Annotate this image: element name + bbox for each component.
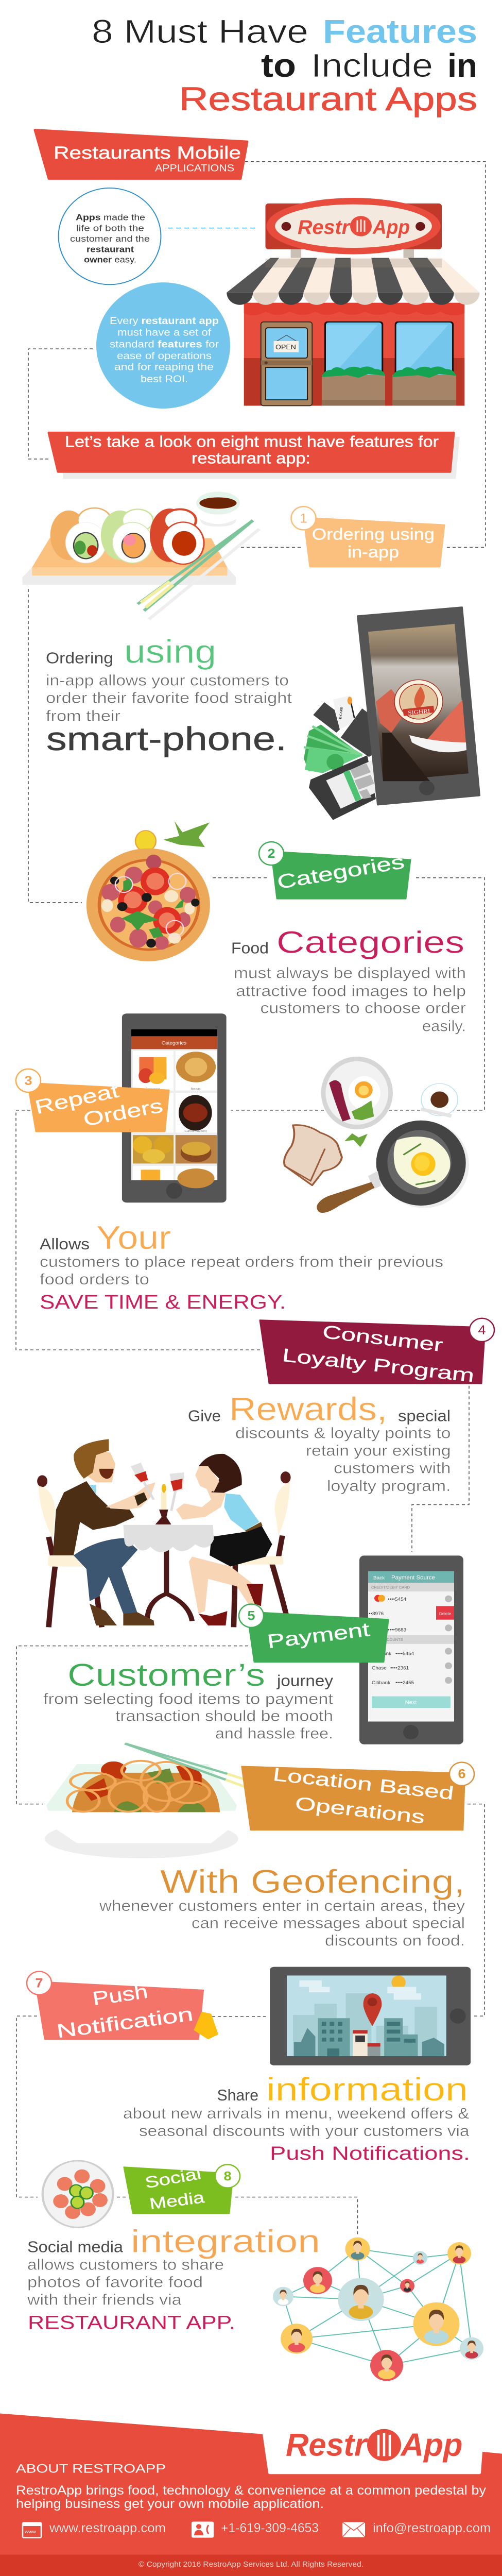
icon: phone with payment screen: ••••2361: [390, 1666, 409, 1671]
text: food categories: customers to choose order: [261, 1000, 466, 1016]
callout: apps circle: life of both the: [76, 223, 144, 233]
banner: let's take a look: Let’s take a look on eight must have features for: [65, 433, 439, 450]
text: social media integration: allows customers to share: [27, 2257, 224, 2274]
banner: 4 consumer loyalty program: Consumer: [321, 1321, 444, 1355]
icon: phone with payment screen: COUNTS: [387, 1637, 403, 1642]
icon: phone with payment screen: ••••5454: [388, 1597, 407, 1602]
banner: 6 location based operations: [241, 1762, 474, 1830]
title: Restaurant Apps: [179, 80, 477, 117]
icon: noodle bowl with chopsticks: [45, 1743, 266, 1858]
icon: breakfast plates and pan: [284, 1057, 469, 1213]
text: give rewards: discounts & loyalty points to: [235, 1425, 451, 1442]
text: customer's journey: and hassle free.: [215, 1725, 333, 1742]
icon: phone with categories screen: Curries (Mutton): [184, 1130, 207, 1133]
callout: every restaurant app circle: [96, 282, 230, 409]
banner: 5 payment: Payment: [266, 1619, 371, 1653]
text: ordering using: smart-phone.: [46, 720, 287, 757]
contact: email: info@restroapp.com: [373, 2520, 491, 2535]
text: share information: seasonal discounts with your customers via: [139, 2123, 470, 2140]
icon: phone with payment screen: ••••5454: [395, 1651, 414, 1656]
text: customer's journey: from selecting food items to payment: [43, 1691, 334, 1707]
text: share information: Share: [217, 2087, 258, 2104]
icon: phone with payment screen: ank: [383, 1651, 391, 1656]
text: food categories: [231, 925, 466, 1035]
text: ordering using: [46, 633, 292, 757]
icon: phone with categories screen: Breads: [191, 1088, 201, 1091]
about text: [16, 2462, 487, 2511]
icon: phone with wallet and payment terminal: E-CARD: [339, 706, 344, 719]
callout: every restaurant app circle: best ROI.: [141, 374, 188, 385]
text: ordering using: order their favorite food straight: [46, 690, 292, 706]
banner: restaurants mobile applications: Restaurants Mobile: [54, 143, 241, 163]
title: Features: [323, 13, 477, 49]
banner: let's take a look: [49, 433, 460, 479]
banner: 1 ordering using in-app: [291, 506, 444, 567]
banner: 4 consumer loyalty program: Loyalty Program: [281, 1345, 475, 1386]
text: allows your customers: Allows: [40, 1235, 90, 1253]
callout: apps circle: owner easy.: [84, 255, 136, 264]
text: with geofencing: can receive messages about special: [192, 1915, 465, 1931]
about text: ABOUT RESTROAPP: [16, 2462, 166, 2476]
text: food categories: easily.: [422, 1018, 466, 1035]
banner: 7 push notification: Push: [91, 1981, 149, 2010]
title: in: [447, 47, 477, 83]
icon: tablet with map pin: [270, 1967, 471, 2065]
text: customer's journey: transaction should be mooth: [115, 1708, 333, 1724]
text: ordering using: Ordering: [46, 649, 113, 667]
icon: restaurant storefront: [227, 198, 479, 405]
text: food categories: Food: [231, 939, 269, 957]
title: [92, 13, 477, 117]
banner: 7 push notification: Notification: [55, 2004, 195, 2042]
icon: restaurant storefront: App: [372, 216, 410, 239]
text: ordering using: using: [124, 633, 216, 670]
banner: 3 repeat orders: Orders: [81, 1095, 165, 1130]
text: social media integration: [27, 2223, 320, 2333]
icon: restaurant storefront: OPEN: [275, 343, 296, 351]
text: allows your customers: customers to place repeat orders from their previous: [40, 1254, 443, 1270]
text: social media integration: integration: [131, 2223, 320, 2259]
contact: website: www: [24, 2529, 37, 2535]
icon: phone with wallet and payment terminal: [304, 607, 479, 820]
logo: RestroApp: App: [400, 2427, 462, 2463]
banner: 6 location based operations: Location Based: [272, 1764, 455, 1804]
text: give rewards: special: [398, 1407, 451, 1425]
banner: 5 payment: [239, 1604, 388, 1662]
text: food categories: Categories: [276, 925, 464, 960]
text: allows your customers: SAVE TIME & ENERGY.: [40, 1292, 286, 1313]
icon: phone with payment screen: Payment Source: [391, 1575, 435, 1581]
callout: apps circle: [59, 188, 161, 284]
text: give rewards: Give: [188, 1407, 221, 1425]
text: ordering using: from their: [46, 708, 120, 724]
banner: 3 repeat orders: 3: [24, 1073, 32, 1088]
text: with geofencing: discounts on food.: [325, 1933, 465, 1949]
logo: RestroApp: Restr: [286, 2427, 368, 2463]
banner: 6 location based operations: Operations: [294, 1793, 426, 1827]
contact: phone: [192, 2520, 319, 2538]
text: food categories: attractive food images to help: [236, 983, 466, 999]
text: with geofencing: With Geofencing,: [160, 1863, 465, 1900]
icon: phone with payment screen: Back: [373, 1575, 385, 1581]
banner: 8 social media: Social: [144, 2164, 202, 2192]
about text: RestroApp brings food, technology & convenience at a common pedestal by: [16, 2483, 487, 2498]
text: customer's journey: [43, 1658, 334, 1742]
icon: phone with categories screen: [122, 1013, 227, 1202]
callout: every restaurant app circle: ease of operations: [117, 350, 212, 362]
text: share information: Push Notifications.: [270, 2143, 470, 2164]
icon: sushi platter: [23, 492, 259, 619]
icon: phone with payment screen: ••••2455: [395, 1680, 414, 1686]
text: allows your customers: food orders to: [40, 1272, 149, 1288]
banner: 7 push notification: [27, 1972, 218, 2042]
copyright: © Copyright 2016 RestroApp Services Ltd. All Rights Reserved.: [139, 2561, 363, 2569]
title: to: [261, 47, 296, 83]
banner: let's take a look: restaurant app:: [192, 449, 310, 467]
icon: phone with categories screen: Beverages: [146, 1088, 160, 1091]
banner: 1 ordering using in-app: in-app: [348, 543, 399, 561]
banner: restaurants mobile applications: APPLICATIONS: [155, 163, 234, 174]
text: ordering using: in-app allows your customers to: [46, 673, 289, 689]
banner: 3 repeat orders: Repeat: [33, 1080, 121, 1118]
contact: website: [23, 2520, 166, 2538]
text: with geofencing: whenever customers enter in certain areas, they: [99, 1898, 465, 1914]
icon: phone with payment screen: Delete: [439, 1612, 451, 1616]
text: give rewards: Rewards,: [229, 1391, 387, 1427]
text: allows your customers: Your: [96, 1219, 171, 1256]
contact: website: www.restroapp.com: [49, 2520, 166, 2535]
text: customer's journey: journey: [276, 1672, 333, 1690]
icon: salami plate: [43, 2161, 113, 2227]
connector: blue dashed: [168, 228, 257, 229]
icon: phone with payment screen: Citibank: [372, 1680, 390, 1686]
logo: RestroApp: [286, 2427, 462, 2463]
callout: apps circle: restaurant: [86, 244, 134, 255]
banner: 8 social media: [124, 2164, 240, 2213]
banner: 1 ordering using in-app: Ordering using: [312, 525, 435, 543]
banner: 1 ordering using in-app: 1: [300, 511, 307, 526]
title: Include: [311, 47, 433, 83]
icon: phone with payment screen: ••8976: [369, 1611, 384, 1617]
banner: 4 consumer loyalty program: [260, 1318, 494, 1386]
icon: restaurant storefront: Restr: [298, 216, 351, 239]
text: share information: about new arrivals in menu, weekend offers &: [123, 2106, 469, 2122]
callout: every restaurant app circle: and for reaping the: [114, 362, 214, 372]
contact: email: [342, 2520, 491, 2537]
banner: 6 location based operations: 6: [458, 1766, 466, 1782]
banner: 5 payment: 5: [247, 1608, 255, 1623]
callout: every restaurant app circle: Every restaurant app: [110, 316, 219, 327]
text: social media integration: RESTAURANT APP.: [28, 2313, 235, 2333]
about text: helping business get your own mobile application.: [16, 2496, 324, 2511]
banner: 2 categories: [259, 842, 410, 899]
icon: pizza: [86, 821, 210, 961]
icon: phone with payment screen: Next: [405, 1700, 417, 1705]
banner: 4 consumer loyalty program: 4: [478, 1323, 486, 1337]
icon: phone with payment screen: CREDIT/DEBIT CARD: [371, 1585, 410, 1589]
text: customer's journey: Customer’s: [67, 1658, 265, 1692]
text: give rewards: [188, 1391, 451, 1495]
banner: 3 repeat orders: [16, 1069, 169, 1131]
callout: every restaurant app circle: standard features for: [110, 339, 219, 350]
text: share information: [123, 2071, 470, 2164]
icon: phone with payment screen: Chase: [372, 1666, 387, 1671]
icon: phone with payment screen: [359, 1555, 463, 1744]
text: allows your customers: [40, 1219, 443, 1313]
callout: apps circle: customer and the: [70, 234, 150, 244]
contact: phone: +1-619-309-4653: [221, 2520, 319, 2535]
callout: apps circle: Apps made the: [76, 212, 145, 222]
banner: 8 social media: Media: [148, 2188, 205, 2213]
text: food categories: must always be displayed with: [234, 965, 466, 981]
banner: 7 push notification: 7: [35, 1975, 43, 1990]
footer panel: [0, 2413, 502, 2576]
icon: phone with payment screen: ••••9683: [388, 1628, 406, 1633]
text: social media integration: photos of favorite food: [27, 2274, 203, 2291]
text: share information: information: [266, 2071, 468, 2108]
text: give rewards: retain your existing: [306, 1443, 451, 1459]
title: 8 Must Have: [92, 13, 308, 49]
banner: restaurants mobile applications: [35, 130, 247, 179]
banner: 2 categories: 2: [267, 846, 275, 861]
text: social media integration: with their friends via: [27, 2292, 182, 2308]
text: give rewards: loyalty program.: [327, 1478, 451, 1495]
icon: social network of people: [273, 2238, 483, 2381]
text: give rewards: customers with: [334, 1460, 451, 1477]
icon: phone with categories screen: Categories: [162, 1041, 186, 1046]
banner: 2 categories: Categories: [275, 851, 406, 893]
text: social media integration: Social media: [27, 2238, 124, 2256]
callout: every restaurant app circle: must have a set of: [117, 327, 211, 338]
icon: couple dining: [37, 1439, 291, 1627]
text: with geofencing: [99, 1863, 465, 1949]
banner: 8 social media: 8: [223, 2168, 232, 2183]
connector: dashed route lines: [16, 162, 486, 2235]
icon: phone with wallet and payment terminal: SIGHRI: [408, 708, 430, 716]
